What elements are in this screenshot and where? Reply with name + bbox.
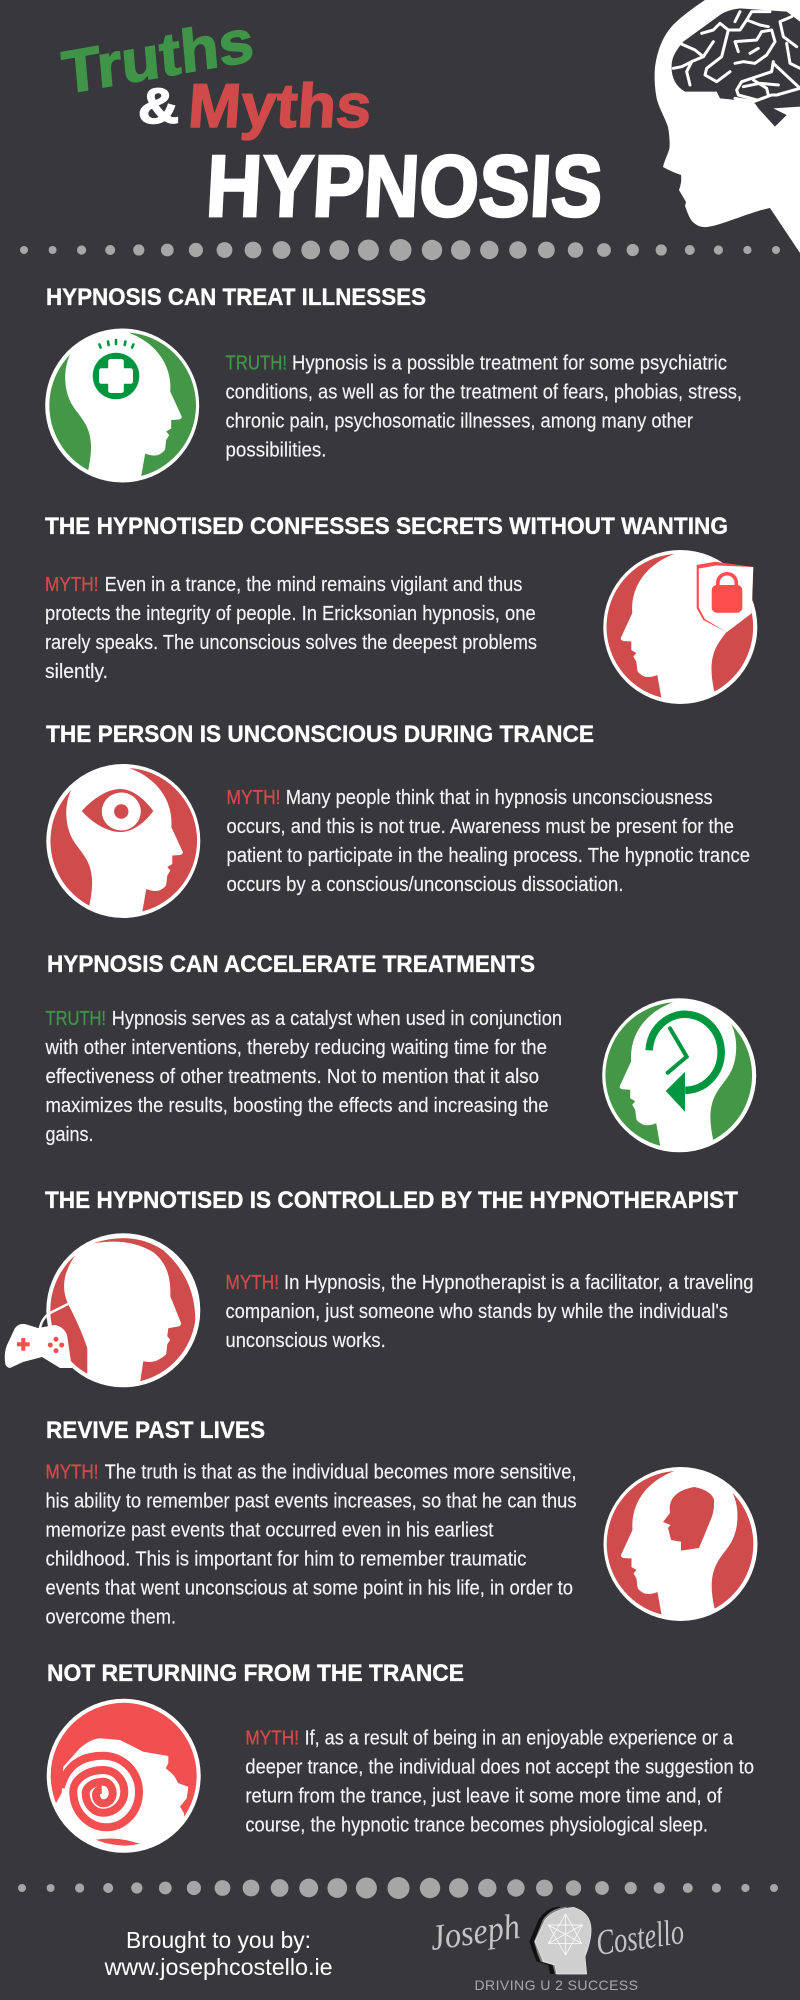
icon: head with brain [655,0,800,253]
body text: MYTH! [226,787,280,809]
panel: controlled by the hypnotherapist [5,1187,754,1387]
panel: revive past lives [46,1417,758,1628]
body text: silently. [45,661,108,683]
logo mark: layered heads [529,1907,591,1974]
body text: with other interventions, thereby reducing waiting time for the [45,1037,547,1059]
panel: confesses secrets [45,513,757,704]
heading: REVIVE PAST LIVES [46,1417,265,1444]
divider: bottom dots [18,1877,778,1899]
body text: maximizes the results, boosting the effects and increasing the [46,1095,548,1117]
body text: MYTH! [46,1461,98,1483]
body text [45,1008,562,1146]
body text: patient to participate in the healing process. The hypnotic trance [226,845,750,867]
body text: TRUTH! [46,1008,106,1030]
heading: THE HYPNOTISED CONFESSES SECRETS WITHOUT WANTING [45,513,728,540]
body text: overcome them. [46,1606,176,1628]
body text: childhood. This is important for him to remember traumatic [46,1548,526,1570]
body text: possibilities. [226,439,326,461]
body text: Hypnosis serves as a catalyst when used in conjunction [112,1008,562,1030]
heading: HYPNOSIS CAN TREAT ILLNESSES [46,284,426,311]
panel: hypnosis can treat illnesses [45,284,742,482]
panel: not returning from the trance [47,1660,754,1853]
body text: occurs, and this is not true. Awareness must be present for the [226,816,734,838]
icon: green head with clock arrow [602,998,756,1152]
title word: Myths: Myths [186,72,374,141]
title [59,6,605,235]
game controller [5,1304,72,1368]
title word: ampersand: & [138,78,179,134]
heading: THE PERSON IS UNCONSCIOUS DURING TRANCE [46,721,594,748]
body text: course, the hypnotic trance becomes physiological sleep. [245,1814,708,1836]
footer credit [104,1927,333,1980]
body text: The truth is that as the individual becomes more sensitive, [105,1461,576,1483]
body text: effectiveness of other treatments. Not to mention that it also [46,1066,539,1088]
body text [226,352,742,461]
body text: protects the integrity of people. In Ericksonian hypnosis, one [45,603,536,625]
logo: Joseph Costello [428,1906,686,1993]
body text [245,1727,754,1836]
body text: unconscious works. [226,1330,386,1352]
icon: red disc with spiral head [47,1699,201,1853]
icon: red head with eye [46,764,200,918]
body text: If, as a result of being in an enjoyable experience or a [305,1727,734,1749]
logo tagline: DRIVING U 2 SUCCESS [474,1977,638,1993]
icon: red head with smaller head inside [604,1467,758,1621]
body text: MYTH! [45,574,98,596]
icon: red head with game controller [5,1233,200,1387]
title word: Hypnosis: HYPNOSIS [204,138,605,235]
footer credit: Brought to you by: [126,1927,311,1953]
body text: return from the trance, just leave it some more time and, of [245,1785,722,1807]
title word: Truths: Truths [59,6,256,107]
body text: his ability to remember past events increases, so that he can thus [46,1490,576,1512]
body text: deeper trance, the individual does not accept the suggestion to [245,1756,754,1778]
body text: In Hypnosis, the Hypnotherapist is a facilitator, a traveling [284,1272,754,1294]
icon: red head with shield and lock [603,550,757,704]
body text: conditions, as well as for the treatment of fears, phobias, stress, [226,381,742,403]
panel: unconscious during trance [46,721,750,918]
logo script: Joseph: Joseph [428,1906,522,1958]
body text [226,1272,754,1352]
body text: chronic pain, psychosomatic illnesses, among many other [226,410,693,432]
body text: gains. [46,1124,94,1146]
body text [226,787,750,896]
heading: HYPNOSIS CAN ACCELERATE TREATMENTS [47,951,535,978]
body text: Many people think that in hypnosis unconsciousness [286,787,713,809]
panel: accelerate treatments [45,951,756,1152]
body text [46,1461,576,1628]
body text: TRUTH! [226,352,287,374]
logo script: Costello: Costello [594,1911,686,1963]
body text: Even in a trance, the mind remains vigilant and thus [105,574,522,596]
body text: MYTH! [245,1727,299,1749]
body text: Hypnosis is a possible treatment for some psychiatric [292,352,727,374]
body text: memorize past events that occurred even in his earliest [46,1519,494,1541]
body text: MYTH! [226,1272,279,1294]
divider: top dots [20,239,780,261]
heading: NOT RETURNING FROM THE TRANCE [47,1660,464,1687]
body text: companion, just someone who stands by while the individual's [226,1301,728,1323]
body text [45,574,537,683]
icon: green head with medical cross [45,328,199,482]
body text: rarely speaks. The unconscious solves the deepest problems [45,632,537,654]
body text: occurs by a conscious/unconscious dissociation. [226,874,624,896]
body text: events that went unconscious at some point in his life, in order to [46,1577,573,1599]
footer credit: www.josephcostello.ie [104,1954,333,1980]
heading: THE HYPNOTISED IS CONTROLLED BY THE HYPNOTHERAPIST [45,1187,738,1214]
